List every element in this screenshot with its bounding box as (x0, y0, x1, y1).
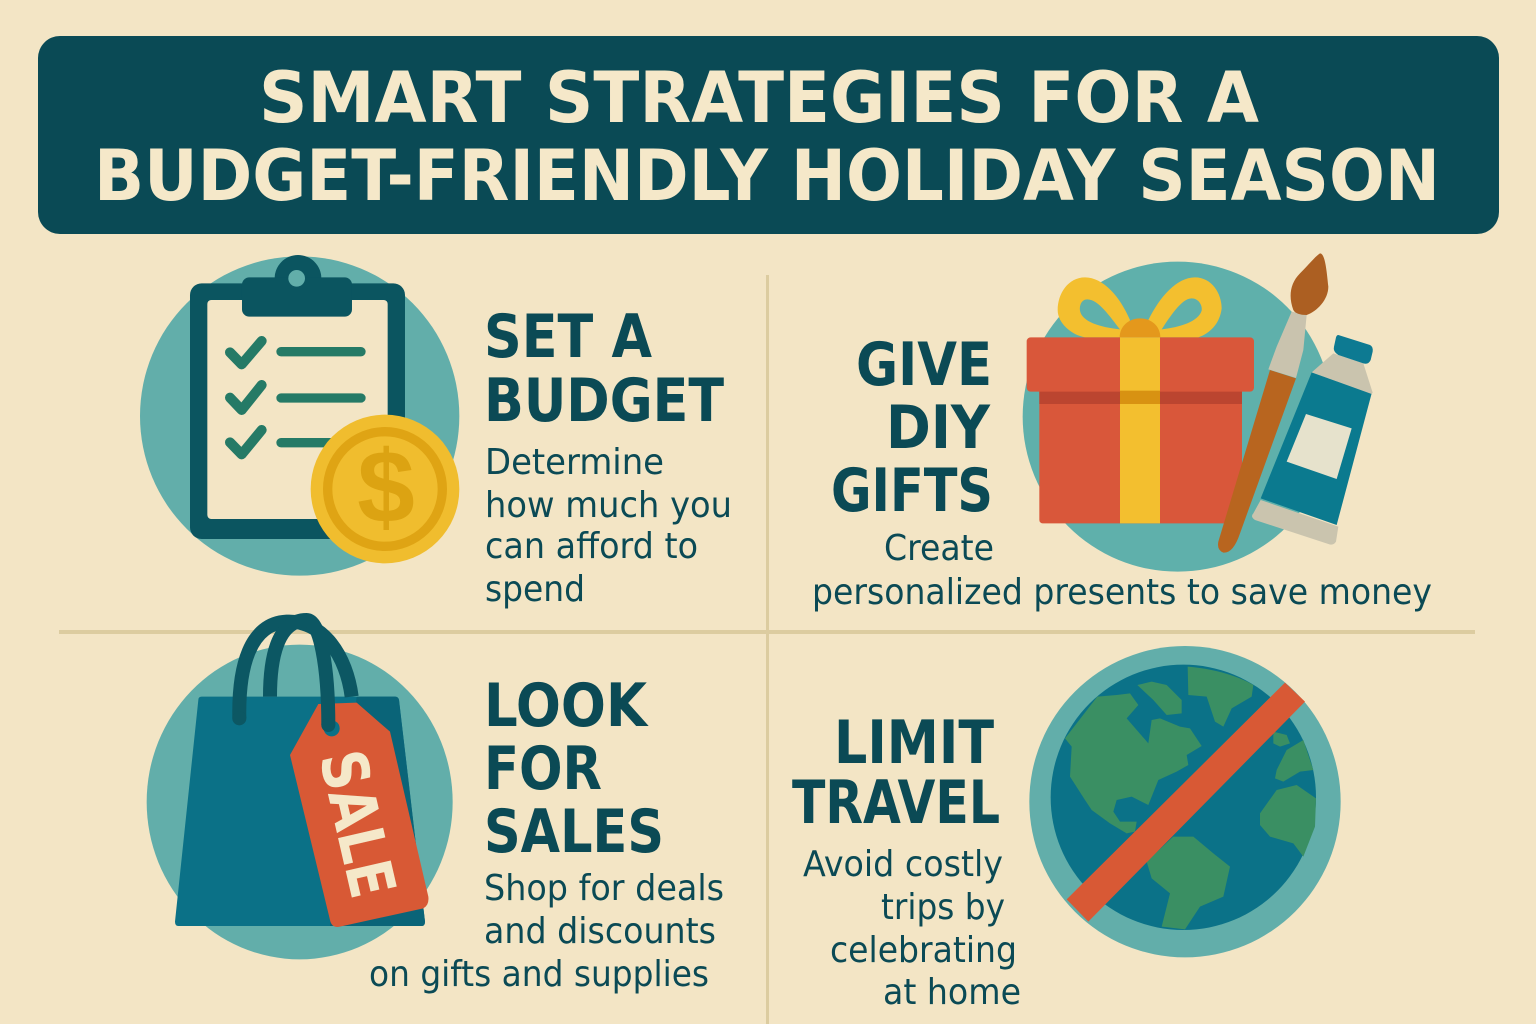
title banner: BUDGET-FRIENDLY HOLIDAY SEASON (94, 135, 1440, 217)
body text: set a budget: spend (485, 569, 585, 610)
icon: clipboard with coin (140, 255, 459, 576)
icon: gift and paint supplies (1023, 253, 1373, 572)
heading: sales: SALES (484, 797, 664, 867)
heading: give: GIVE (856, 330, 992, 400)
body text: set a budget: Determine (485, 442, 664, 483)
heading: set a: SET A (484, 302, 652, 372)
panel: limit travel (792, 646, 1341, 1013)
body text: set a budget: how much you (485, 485, 732, 526)
title banner (38, 36, 1499, 234)
body text: look for sales: on gifts and supplies (369, 954, 709, 995)
body text: limit travel (803, 844, 1021, 1013)
heading: for: FOR (484, 734, 602, 804)
body text: set a budget: can afford to (485, 526, 698, 567)
panel: look for sales (147, 620, 724, 995)
icon: crossed-out globe (1029, 646, 1341, 957)
panel: give diy gifts (812, 253, 1432, 613)
icon: shopping bag with sale tag: SALE (305, 743, 410, 905)
heading: look: LOOK (484, 671, 649, 741)
body text: look for sales: and discounts (484, 911, 716, 952)
heading: gifts: GIFTS (831, 456, 993, 526)
heading: limit: LIMIT (834, 708, 994, 778)
heading: diy: DIY (886, 393, 991, 463)
body text: give diy gifts: Create (884, 528, 994, 569)
body text: look for sales: Shop for deals (484, 868, 724, 909)
title banner: SMART STRATEGIES FOR A (259, 57, 1259, 139)
body text: set a budget (485, 442, 732, 610)
icon: clipboard with coin: $ (357, 428, 415, 544)
body text: look for sales (369, 868, 724, 995)
body text: limit travel: Avoid costly (803, 844, 1003, 885)
body text: limit travel: at home (883, 972, 1021, 1013)
heading: travel: TRAVEL (792, 768, 1000, 838)
body text: limit travel: trips by (881, 887, 1005, 928)
body text: give diy gifts: personalized presents to save money (812, 572, 1432, 613)
body text: limit travel: celebrating (830, 930, 1017, 971)
heading: budget: BUDGET (484, 366, 724, 436)
body text: give diy gifts (812, 528, 1432, 613)
icon: shopping bag with sale tag (147, 620, 453, 959)
panel: set a budget (140, 255, 732, 610)
